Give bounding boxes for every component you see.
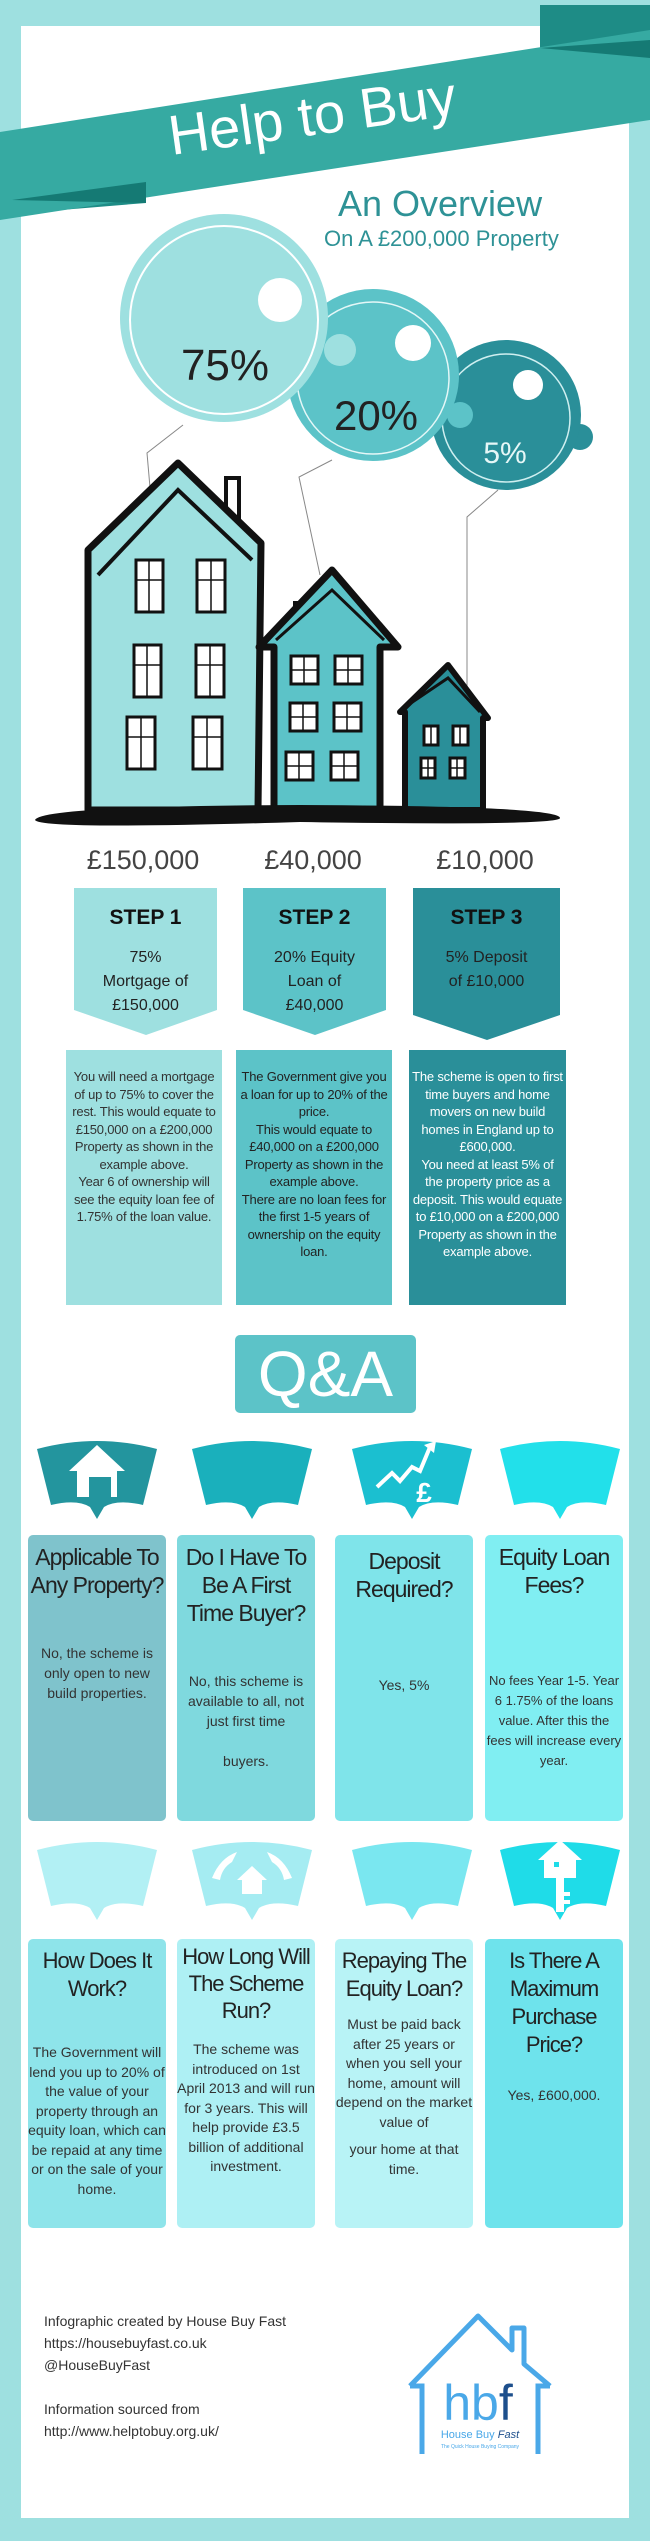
- Q&A heading: [235, 1335, 416, 1413]
- card: how long: [177, 1939, 315, 2228]
- windows: [127, 560, 468, 780]
- logo: hbf: hbf: [443, 2375, 513, 2431]
- card: repaying: Repaying The Equity Loan?: [342, 1948, 466, 2001]
- icon row 2: [37, 1842, 620, 1920]
- prices: £150,000: [87, 845, 199, 875]
- card: fees: No fees Year 1-5. Year 6 1.75% of the loans value. After this the fees will increase every year.: [487, 1673, 621, 1768]
- card: first time buyer: [177, 1535, 315, 1821]
- icon: blank mid: [352, 1842, 472, 1920]
- card: applicable: Applicable To Any Property?: [31, 1544, 163, 1598]
- card: applicable: [28, 1535, 166, 1821]
- medium house: [295, 603, 309, 628]
- step 2 description: There are no loan fees for the first 1-5 years of ownership on the equity loan.: [242, 1192, 386, 1259]
- step 2 description: This would equate to £40,000 on a £200,000 Property as shown in the example above.: [245, 1122, 383, 1189]
- card: first time buyer: No, this scheme is available to all, not just first time: [188, 1673, 304, 1729]
- card: repaying: Must be paid back after 25 years or when you sell your home, amount will depend on the market value of: [336, 2016, 472, 2130]
- step 2 banner: [243, 888, 386, 1035]
- text: £40,000: [264, 845, 362, 875]
- subtitle: On A £200,000 Property: [324, 226, 559, 251]
- circles and houses illustration: 75%: [181, 341, 269, 390]
- card: how long: The scheme was introduced on 1st April 2013 and will run for 3 years. This will help provide £3.5 billion of additional investment.: [177, 2041, 315, 2174]
- text: £10,000: [436, 845, 534, 875]
- step 2 banner: £40,000: [286, 997, 343, 1014]
- icon: pound chart: £: [416, 1477, 432, 1508]
- step 2 banner: Loan of: [288, 973, 341, 990]
- step 1 description: Year 6 of ownership will see the equity loan fee of 1.75% of the loan value.: [74, 1174, 214, 1224]
- card: first time buyer: Do I Have To Be A First Time Buyer?: [186, 1544, 306, 1626]
- step 3 banner: of £10,000: [449, 973, 524, 990]
- card: deposit: Yes, 5%: [379, 1677, 429, 1693]
- card: deposit: [335, 1535, 473, 1821]
- step 1 description: [66, 1050, 222, 1305]
- circles and houses illustration: [35, 214, 593, 826]
- step 3 banner: [413, 888, 560, 1040]
- step 1 banner: STEP 1: [110, 906, 181, 929]
- subtitle: [324, 183, 559, 251]
- circles and houses illustration: 20%: [334, 392, 418, 439]
- big house: [226, 478, 239, 518]
- card: fees: Equity Loan Fees?: [499, 1544, 609, 1598]
- footer credits: [44, 2313, 286, 2439]
- card: max price: Is There A Maximum Purchase Price?: [509, 1948, 599, 2057]
- footer credits: Information sourced from: [44, 2401, 200, 2417]
- step 1 banner: 75%: [129, 949, 162, 966]
- 5% circle: [567, 424, 593, 450]
- 75% circle: [324, 334, 356, 366]
- card: deposit: Deposit Required?: [355, 1548, 453, 1602]
- logo: hbf: House Buy Fast: [441, 2429, 520, 2441]
- footer credits: Infographic created by House Buy Fast: [44, 2313, 286, 2329]
- footer credits: http://www.helptobuy.org.uk/: [44, 2423, 219, 2439]
- logo: hbf: [408, 2314, 552, 2454]
- card: repaying: [335, 1939, 473, 2228]
- footer credits: @HouseBuyFast: [44, 2357, 150, 2373]
- step 2 banner: 20% Equity: [274, 949, 355, 966]
- card: max price: [485, 1939, 623, 2228]
- card: how does it work: How Does It Work?: [43, 1948, 151, 2001]
- icon: hands house: [192, 1842, 312, 1920]
- icon: blank 2: [500, 1441, 620, 1519]
- step 2 description: [236, 1050, 392, 1305]
- icon: pound chart: [352, 1441, 472, 1519]
- logo: hbf: The Quick House Buying Company: [441, 2444, 520, 2450]
- title ribbon: Help to Buy: [164, 64, 460, 167]
- icon row 1: [37, 1441, 620, 1519]
- subtitle: An Overview: [338, 183, 542, 224]
- step 1 banner: [74, 888, 217, 1035]
- step 2 description: The Government give you a loan for up to 20% of the price.: [240, 1069, 388, 1119]
- step 3 description: You need at least 5% of the property price as a deposit. This would equate to £10,000 on a £200,000 Property as shown in the example above.: [413, 1156, 562, 1259]
- card: how does it work: [28, 1939, 166, 2228]
- footer credits: https://housebuyfast.co.uk: [44, 2335, 207, 2351]
- icon: blank light: [37, 1842, 157, 1920]
- icon: house: [37, 1441, 157, 1519]
- 20% circle: [447, 402, 473, 428]
- step 3 description: [409, 1050, 566, 1305]
- small house: [400, 665, 488, 810]
- card: fees: [485, 1535, 623, 1821]
- step 1 banner: Mortgage of: [103, 973, 188, 990]
- card: repaying: your home at that time.: [350, 2141, 458, 2176]
- Q&A heading: Q&A: [258, 1338, 393, 1410]
- circles and houses illustration: 5%: [483, 437, 527, 470]
- step 1 description: You will need a mortgage of up to 75% to cover the rest. This would equate to £150,000 on a £200,000 Property as shown in the example above.: [72, 1069, 216, 1172]
- icon: house key: [500, 1842, 620, 1920]
- connector lines: [147, 425, 183, 545]
- step 1 banner: £150,000: [112, 997, 179, 1014]
- card: first time buyer: buyers.: [223, 1753, 269, 1769]
- step 3 description: The scheme is open to first time buyers and home movers on new build homes in England up to £600,000.: [412, 1069, 563, 1154]
- step 3 banner: STEP 3: [450, 906, 522, 929]
- step 3 banner: 5% Deposit: [446, 949, 527, 966]
- step 2 banner: STEP 2: [278, 906, 350, 929]
- card: how does it work: The Government will lend you up to 20% of the value of your property through an equity loan, which can be repaid at any time or on the sale of your home.: [28, 2044, 166, 2196]
- card: how long: How Long Will The Scheme Run?: [182, 1944, 310, 2023]
- card: max price: Yes, £600,000.: [508, 2087, 600, 2103]
- title ribbon: [0, 5, 650, 220]
- icon: blank: [192, 1441, 312, 1519]
- ground: [35, 805, 560, 826]
- card: applicable: No, the scheme is only open to new build properties.: [41, 1645, 153, 1701]
